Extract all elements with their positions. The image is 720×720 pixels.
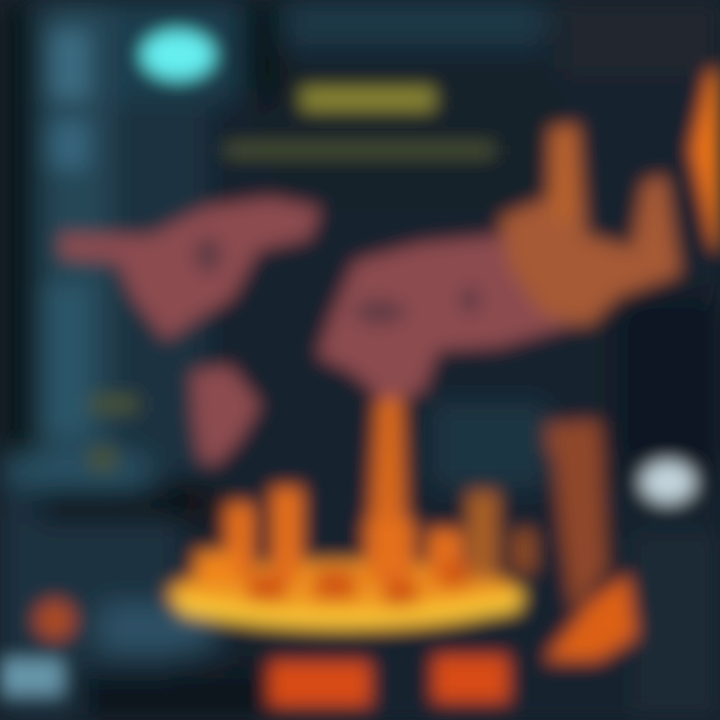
subheading: blurred yellow text <box>226 143 494 157</box>
chart: rising flame line <box>500 72 720 326</box>
fire platform <box>169 488 536 629</box>
flame bars <box>196 488 536 586</box>
region: South America <box>192 366 260 466</box>
map dark patches <box>194 237 480 324</box>
bottom flames <box>270 656 508 706</box>
central flame column <box>370 396 406 535</box>
world map <box>60 198 625 476</box>
icon: cyan glow <box>142 31 214 79</box>
table surface <box>0 455 720 720</box>
icon: small orange blob <box>35 600 75 640</box>
region: North America <box>60 198 320 340</box>
background: dark city panels <box>0 0 720 490</box>
region: Eurasia and Africa <box>318 236 625 400</box>
small yellow marks <box>90 395 138 470</box>
right flame column <box>545 422 636 660</box>
heading: blurred yellow title <box>302 88 434 110</box>
region: Southeast <box>545 420 604 476</box>
icon: white glow <box>642 462 694 502</box>
light blue panel <box>0 660 62 694</box>
